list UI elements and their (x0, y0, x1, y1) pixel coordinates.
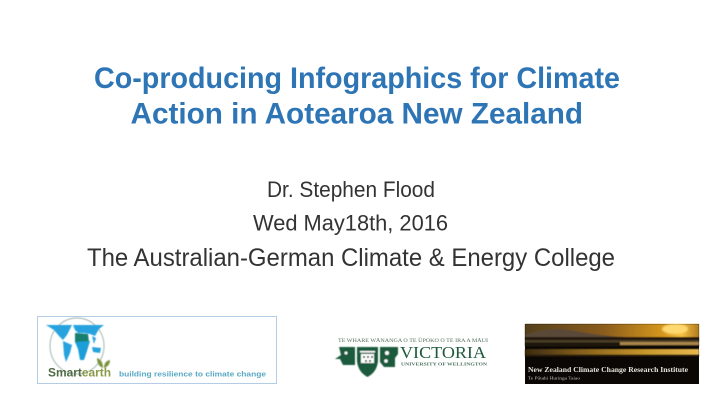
logo tagline: building resilience to climate change (119, 372, 266, 378)
institute name: New Zealand Climate Change Research Institute (528, 366, 688, 374)
icon: globe with world map (46, 318, 104, 374)
title: Action in Aotearoa New Zealand (130, 98, 583, 130)
motto: TE WHARE WĀNANGA O TE ŪPOKO O TE IRA A MĀUI (338, 338, 488, 344)
sunset photo (525, 324, 699, 356)
sub-wordmark: UNIVERSITY OF WELLINGTON (401, 362, 488, 366)
logo wordmark: Smartearth (48, 366, 111, 380)
title: Co-producing Infographics for Climate (94, 62, 620, 95)
icon: leaf (97, 358, 110, 368)
logo: New Zealand Climate Change Research Institute (525, 324, 699, 384)
wordmark: VICTORIA (400, 343, 487, 362)
institute Māori name: Te Pūtahi Huringa Taiao (528, 376, 580, 380)
presenter name: Dr. Stephen Flood (267, 177, 435, 202)
organisation: The Australian-German Climate & Energy College (87, 244, 615, 272)
title (94, 62, 620, 130)
icon: crest (335, 347, 398, 377)
logo: Victoria University of Wellington (335, 338, 488, 377)
logo: Smartearth (38, 316, 276, 384)
date: Wed May18th, 2016 (253, 210, 448, 236)
